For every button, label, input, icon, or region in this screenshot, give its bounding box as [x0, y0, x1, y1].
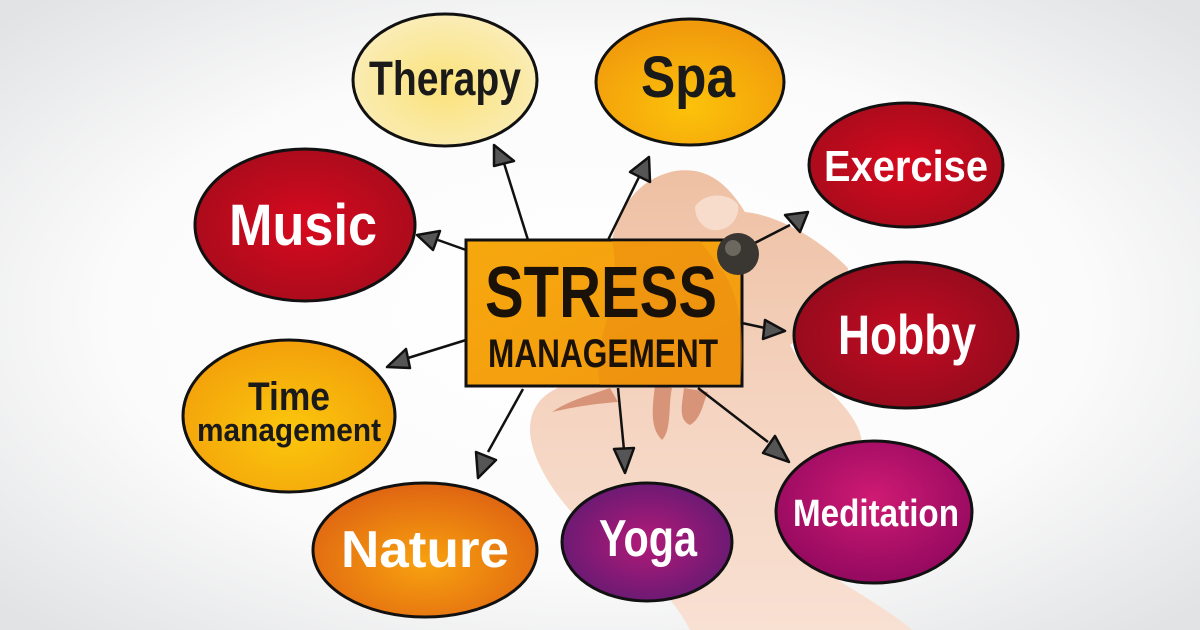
finger shadows	[552, 385, 708, 440]
bubble: exercise: Exercise	[824, 142, 988, 191]
central box: stress management: STRESS	[485, 253, 717, 333]
bubble: nature: Nature	[341, 521, 509, 579]
bubble: time management: Time	[248, 375, 330, 419]
bubble: time management	[183, 340, 395, 492]
bubble: spa	[596, 19, 784, 145]
central box: stress management: MANAGEMENT	[488, 332, 718, 376]
central box: stress management	[466, 240, 742, 386]
hand seen through box	[598, 241, 742, 385]
bubble: spa: Spa	[641, 45, 736, 110]
bubble: meditation: Meditation	[793, 493, 959, 535]
bubble: hobby	[794, 262, 1018, 408]
bubble: exercise	[809, 103, 1003, 227]
thumb nail	[695, 195, 738, 230]
bubble: nature	[313, 483, 537, 617]
hand	[530, 170, 912, 630]
bubble: yoga: Yoga	[599, 510, 698, 568]
bubble: music: Music	[229, 193, 377, 258]
bubble: meditation	[776, 441, 972, 583]
bubble: music	[195, 149, 415, 301]
marker tip	[717, 233, 759, 275]
bubble: time management: management	[197, 412, 381, 448]
arrows	[387, 145, 808, 478]
bubble: therapy: Therapy	[369, 53, 521, 106]
bubble: yoga	[562, 483, 732, 601]
bubble: hobby: Hobby	[838, 303, 976, 366]
bubble: therapy	[353, 14, 537, 146]
